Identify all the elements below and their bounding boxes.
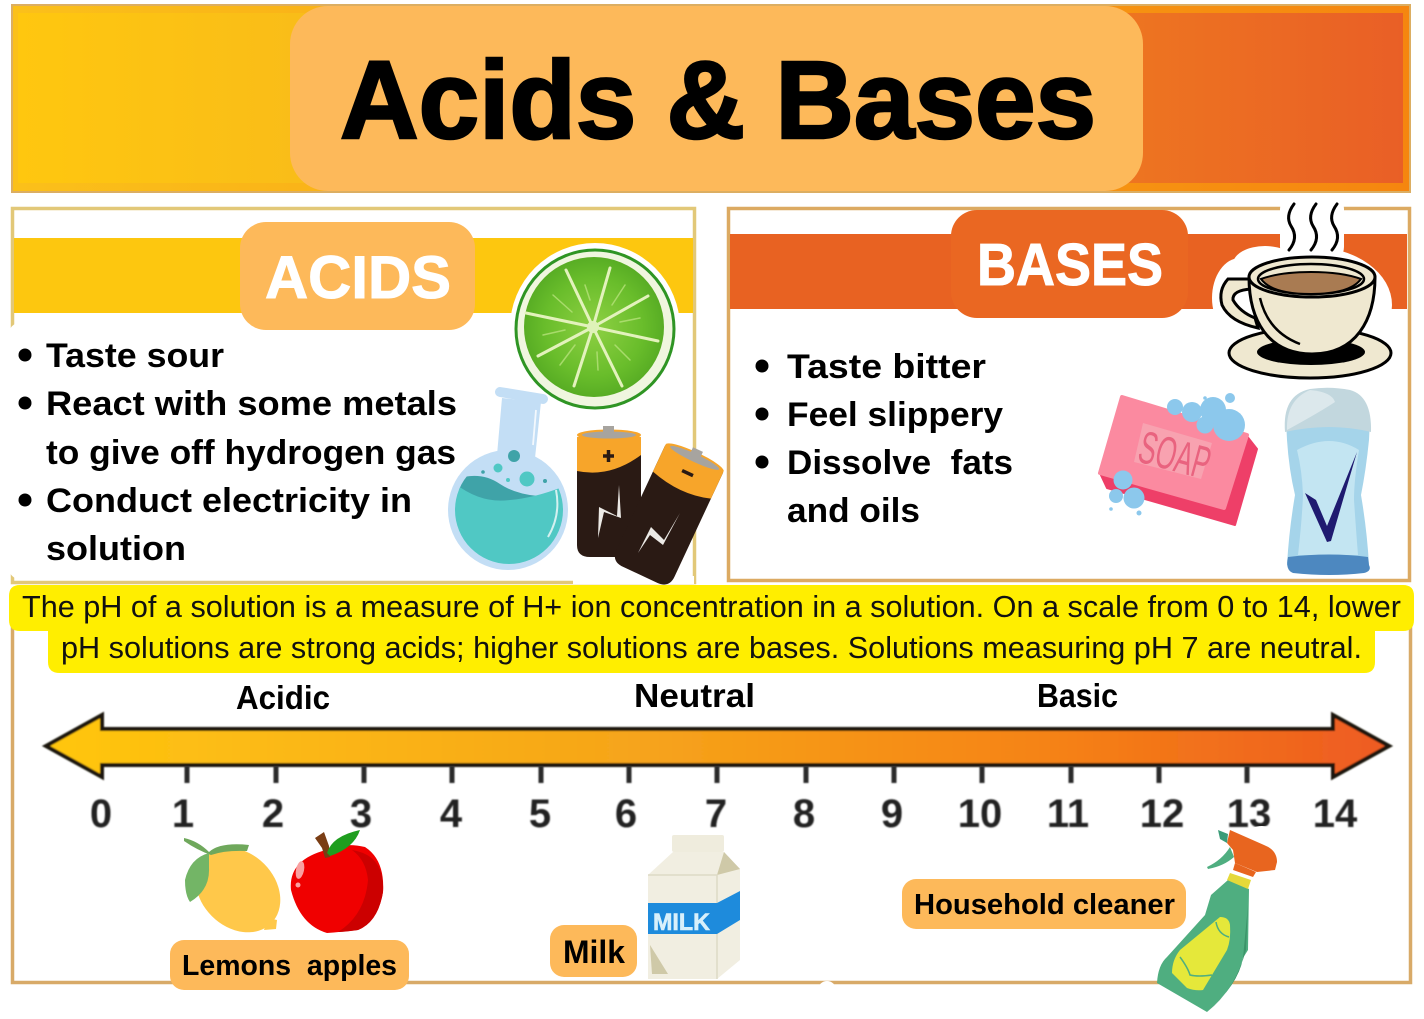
title: Acids & Bases [340, 39, 1096, 162]
scale numbers [90, 792, 1358, 836]
icon: soap bar: SOAP [1133, 420, 1216, 489]
icon: battery minus [611, 436, 727, 588]
scale numbers: 4 [440, 792, 463, 836]
icon: flask [448, 392, 568, 570]
scale numbers: 8 [793, 792, 815, 836]
pH explanation text [9, 585, 1414, 673]
bases bullet list: and oils [787, 492, 920, 530]
icon: soap bar [1100, 393, 1257, 525]
bases bullet list: Dissolve fats [787, 444, 1013, 482]
scale numbers: 11 [1047, 792, 1089, 836]
header banner [12, 5, 1410, 192]
acids bullet list: Conduct electricity in [46, 482, 412, 520]
acids bullet list: to give off hydrogen gas [46, 434, 456, 472]
panel: acids [8, 208, 727, 588]
icon: coffee cup [1212, 193, 1399, 385]
icon: lemon [179, 831, 297, 949]
tick marks [187, 766, 1247, 783]
label: lemons apples [170, 940, 409, 990]
icon: lime slice [510, 243, 680, 413]
label: lemons apples: Lemons apples [182, 950, 397, 982]
scale labels: Basic [1037, 677, 1118, 714]
icon: apple [291, 830, 383, 933]
scale numbers: 0 [90, 792, 112, 836]
title pill [290, 6, 1143, 191]
icon: deodorant [1285, 388, 1371, 575]
acids text background [8, 322, 568, 580]
bases bullet list [756, 348, 1013, 530]
scale numbers: 6 [615, 792, 637, 836]
acids heading pill [240, 222, 475, 330]
pH explanation text: The pH of a solution is a measure of H+ ion concentration in a solution. On a scale from 0 to 14, lower [22, 590, 1401, 624]
scale labels: Acidic [236, 679, 330, 716]
scale numbers: 7 [705, 792, 727, 836]
icon: milk carton [648, 835, 740, 979]
acids heading pill: ACIDS [265, 244, 451, 311]
bases heading pill: BASES [977, 232, 1163, 298]
acids bullet list [18, 337, 457, 568]
acids bullet list: React with some metals [46, 385, 457, 423]
panel: pH scale [9, 585, 1414, 1012]
bases bullet list: Feel slippery [787, 396, 1003, 434]
acids bullet list: solution [46, 530, 186, 568]
scale numbers: 14 [1313, 792, 1358, 836]
icon: spray bottle [1157, 826, 1288, 1012]
panel: bases [728, 193, 1410, 580]
icon: battery plus [577, 426, 641, 557]
bases heading pill [951, 210, 1188, 318]
white notch on bottom edge [818, 981, 836, 999]
label: milk [550, 925, 637, 977]
scale numbers: 5 [529, 792, 551, 836]
acids bullet list: Taste sour [46, 337, 224, 375]
scale numbers: 2 [262, 792, 284, 836]
scale numbers: 12 [1140, 792, 1184, 836]
scale numbers: 1 [172, 792, 194, 836]
scale numbers: 13 [1227, 792, 1271, 836]
bases colour band [730, 234, 1407, 309]
label: household cleaner: Household cleaner [914, 889, 1175, 921]
label: household cleaner [902, 879, 1186, 929]
pH arrow [46, 715, 1389, 777]
icon: milk carton: MILK [653, 909, 711, 936]
acids colour band [14, 238, 693, 313]
scale numbers: 3 [350, 792, 372, 836]
scale numbers: 10 [958, 792, 1002, 836]
scale labels: Neutral [634, 677, 755, 714]
scale numbers: 9 [881, 792, 903, 836]
label: milk: Milk [563, 934, 625, 970]
pH explanation text: pH solutions are strong acids; higher solutions are bases. Solutions measuring pH 7 are neutral. [61, 631, 1362, 665]
bases bullet list: Taste bitter [787, 348, 986, 386]
scale labels [236, 677, 1118, 716]
white cover under batteries [573, 576, 694, 584]
